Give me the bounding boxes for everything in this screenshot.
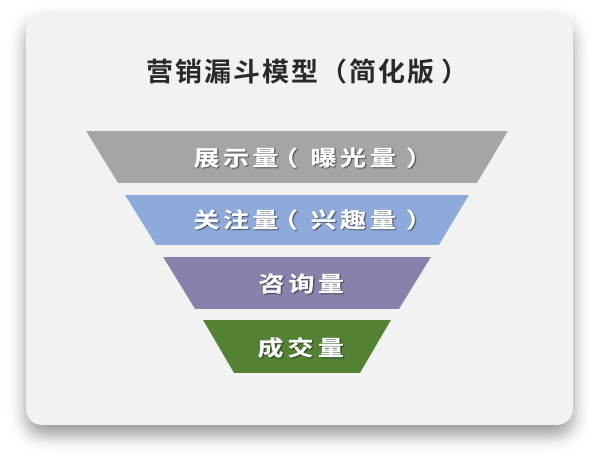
funnel tier 3: inquiries: 咨询量	[258, 273, 344, 297]
funnel tier 1: impressions: 展示量（曝光量）	[194, 147, 432, 171]
funnel tier 4: conversions	[203, 320, 391, 373]
funnel tier 2: interest	[125, 195, 469, 245]
title: 营销漏斗模型（简化版）	[146, 57, 468, 87]
funnel tier 2: interest: 关注量（兴趣量）	[194, 209, 432, 233]
funnel tier 1: impressions	[86, 131, 508, 183]
funnel tier 4: conversions: 成交量	[258, 336, 344, 361]
funnel tier 3: inquiries	[163, 257, 431, 309]
